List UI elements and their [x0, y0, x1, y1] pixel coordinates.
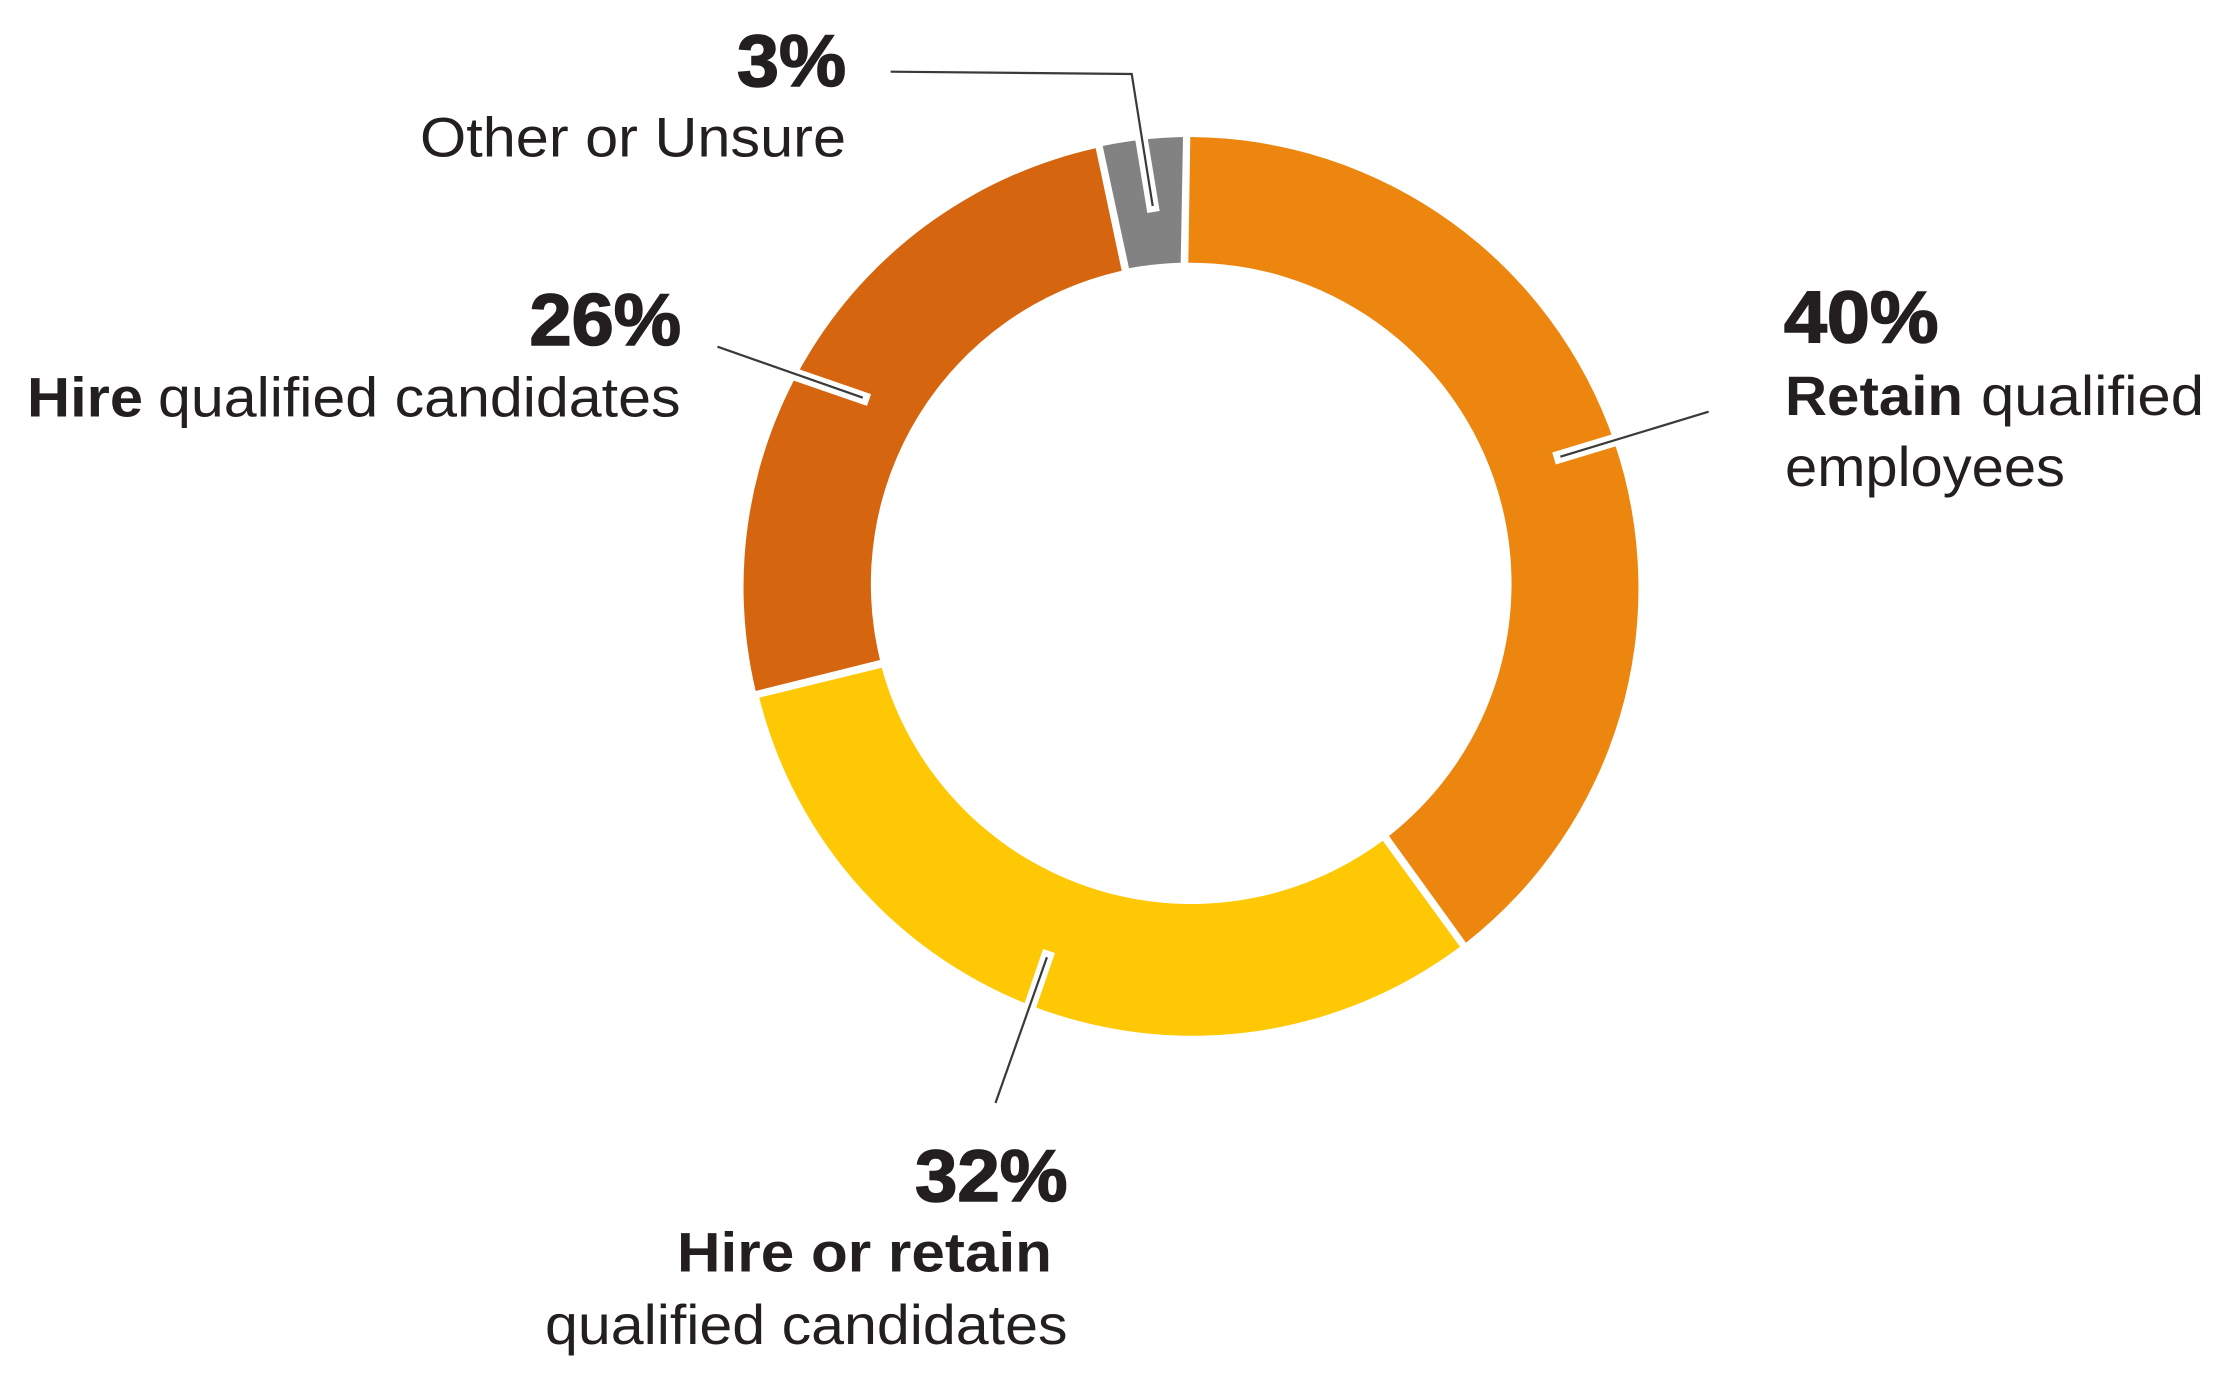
label: 3% other or unsure: 3%	[737, 21, 846, 102]
leader: 26%	[718, 347, 869, 400]
donut ring	[744, 137, 1638, 1036]
label: 40% retain qualified employees	[1784, 278, 2204, 498]
label: 40% retain qualified employees: employees	[1785, 435, 2065, 498]
label: 26% hire qualified candidates	[27, 280, 681, 429]
label: 32% hire or retain qualified candidates: qualified candidates	[545, 1293, 1068, 1356]
segment: other 3%	[1103, 137, 1183, 268]
label: 26% hire qualified candidates: 26%	[530, 280, 681, 361]
leader: 3%	[891, 72, 1154, 212]
label: 32% hire or retain qualified candidates: 32%	[915, 1136, 1068, 1217]
leader: 40%	[1554, 412, 1709, 458]
label: 40% retain qualified employees: Retain	[1785, 364, 1963, 427]
label: 26% hire qualified candidates: Hire	[27, 366, 143, 429]
label: 32% hire or retain qualified candidates: Hire or retain	[677, 1221, 1052, 1284]
label: 32% hire or retain qualified candidates	[545, 1136, 1068, 1356]
label: 3% other or unsure: Other or Unsure	[420, 106, 846, 169]
label: 40% retain qualified employees: qualified	[1981, 364, 2204, 427]
leader: 32%	[996, 951, 1049, 1103]
label: 3% other or unsure	[420, 21, 846, 169]
label: 26% hire qualified candidates: qualified candidates	[158, 366, 680, 429]
segment: retain 40%	[1188, 137, 1638, 943]
segment: hire 26%	[744, 148, 1122, 691]
segment: hire or retain 32%	[759, 668, 1460, 1036]
label: 40% retain qualified employees: 40%	[1784, 278, 1938, 359]
